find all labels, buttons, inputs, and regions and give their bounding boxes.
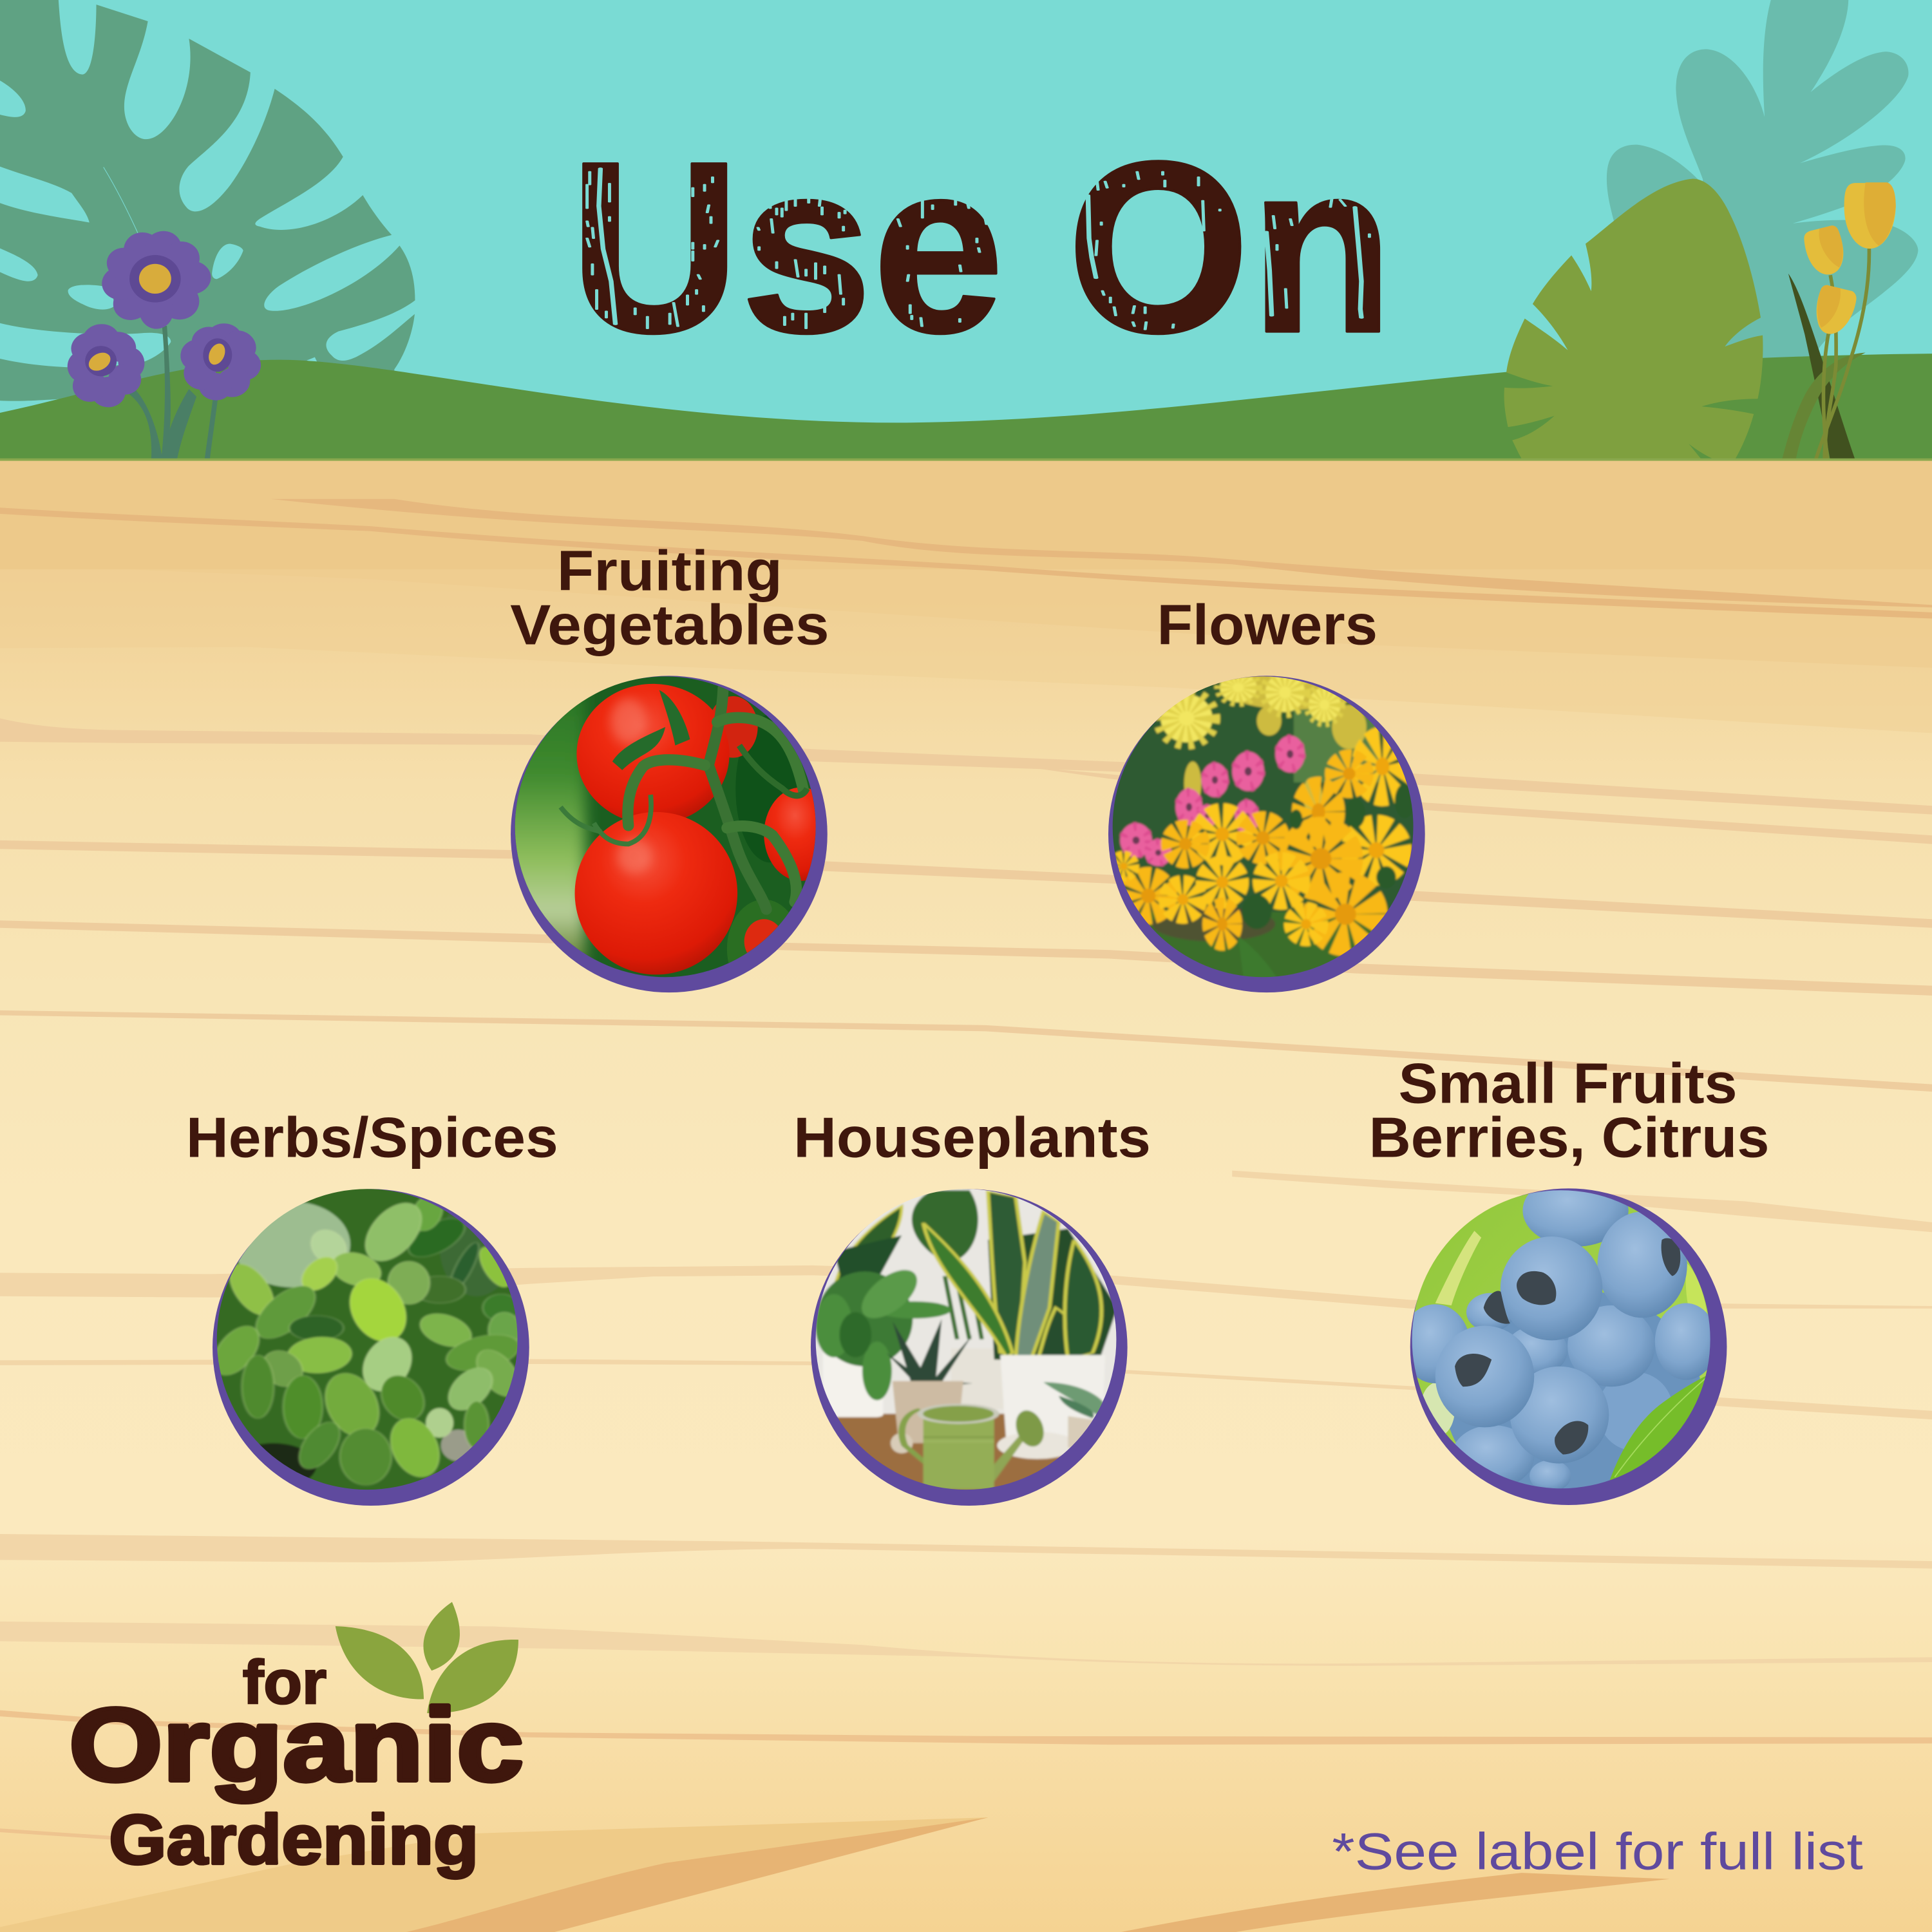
purple ring (511, 676, 828, 992)
wood background (0, 459, 1932, 1932)
back pots (951, 1349, 1003, 1409)
right pale background leaves (1607, 0, 1918, 365)
category: flowers (1108, 593, 1429, 998)
category: fruiting vegetables (510, 549, 828, 993)
wood grain streaks (0, 499, 1932, 618)
green hill (0, 354, 1932, 462)
logo: for organic gardening: Organic (69, 1688, 524, 1803)
heading: fruiting vegetables (510, 538, 829, 657)
large green leaf (1504, 179, 1763, 461)
left monstera leaf (0, 0, 415, 426)
big white pot (998, 1352, 1103, 1438)
heading: small fruits berries citrus: Berries, Citrus (1369, 1106, 1769, 1170)
photo: basil (216, 1189, 518, 1490)
heading: small fruits berries citrus: Small Fruits (1399, 1051, 1738, 1115)
small striped plant (1043, 1382, 1105, 1416)
title: Use (569, 111, 1004, 384)
flower stems (126, 326, 218, 461)
category: herbs and spices (186, 1106, 558, 1506)
snake plants (988, 1229, 1117, 1362)
title: On (1067, 111, 1394, 384)
title (569, 111, 1394, 384)
heading: houseplants: Houseplants (793, 1106, 1151, 1170)
purple ring (1410, 1188, 1727, 1505)
photo: blueberries (1401, 1175, 1730, 1506)
sky background (0, 0, 1932, 462)
logo: for organic gardening: for (243, 1648, 327, 1717)
yellow tulips (1804, 182, 1896, 334)
purple ring (1108, 676, 1425, 992)
category: small fruits, berries and citrus (1369, 1051, 1769, 1506)
photo: houseplants (815, 1189, 1117, 1490)
heading: small fruits berries citrus (1369, 1051, 1769, 1170)
aloe plant (886, 1319, 972, 1389)
heading: fruiting vegetables: Fruiting (557, 538, 782, 602)
purple ring (213, 1189, 529, 1506)
left purple flower (64, 321, 148, 408)
back plant leaves (834, 1206, 902, 1298)
footnote: *See label for full list (1332, 1823, 1863, 1880)
heading: flowers: Flowers (1157, 593, 1378, 657)
icon: three green leaves (336, 1602, 518, 1713)
purple ring (811, 1189, 1128, 1506)
tulip stems (1815, 249, 1869, 461)
dark grass blade (1788, 274, 1855, 461)
fern (815, 1268, 951, 1400)
left flowers (64, 227, 263, 461)
heading: herbs/spices: Herbs/Spices (186, 1106, 558, 1170)
right purple flower (177, 321, 263, 402)
logo: for organic gardening (69, 1602, 524, 1879)
main purple flower (100, 227, 212, 330)
right green leaf and tulips (1504, 179, 1896, 461)
heading: fruiting vegetables: Vegetables (510, 593, 829, 657)
category: houseplants (793, 1106, 1151, 1506)
photo: flower garden (1113, 676, 1413, 978)
logo: for organic gardening: Gardening (109, 1801, 478, 1879)
watering can (902, 1405, 1046, 1490)
wicker pot (893, 1381, 963, 1443)
curved grass blade (1782, 353, 1866, 461)
photo: tomatoes (515, 676, 816, 978)
